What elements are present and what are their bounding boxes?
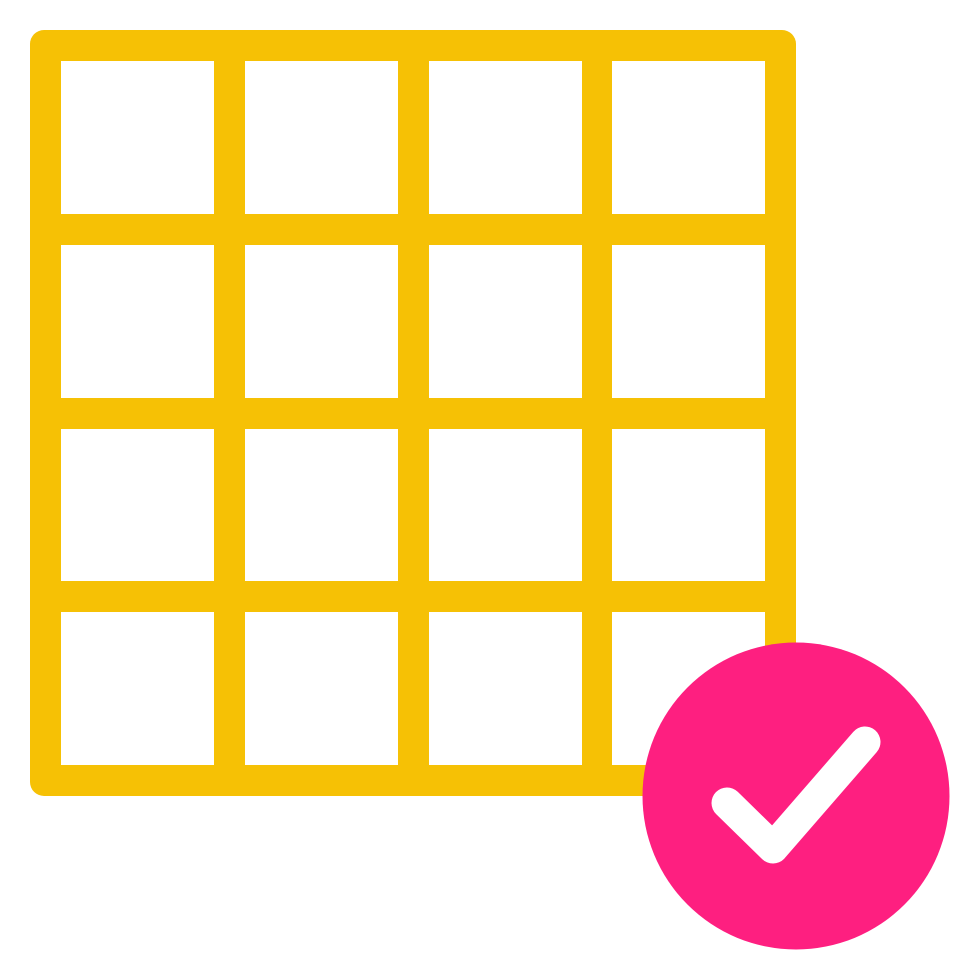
grid table [30,30,796,796]
check badge [642,642,950,950]
